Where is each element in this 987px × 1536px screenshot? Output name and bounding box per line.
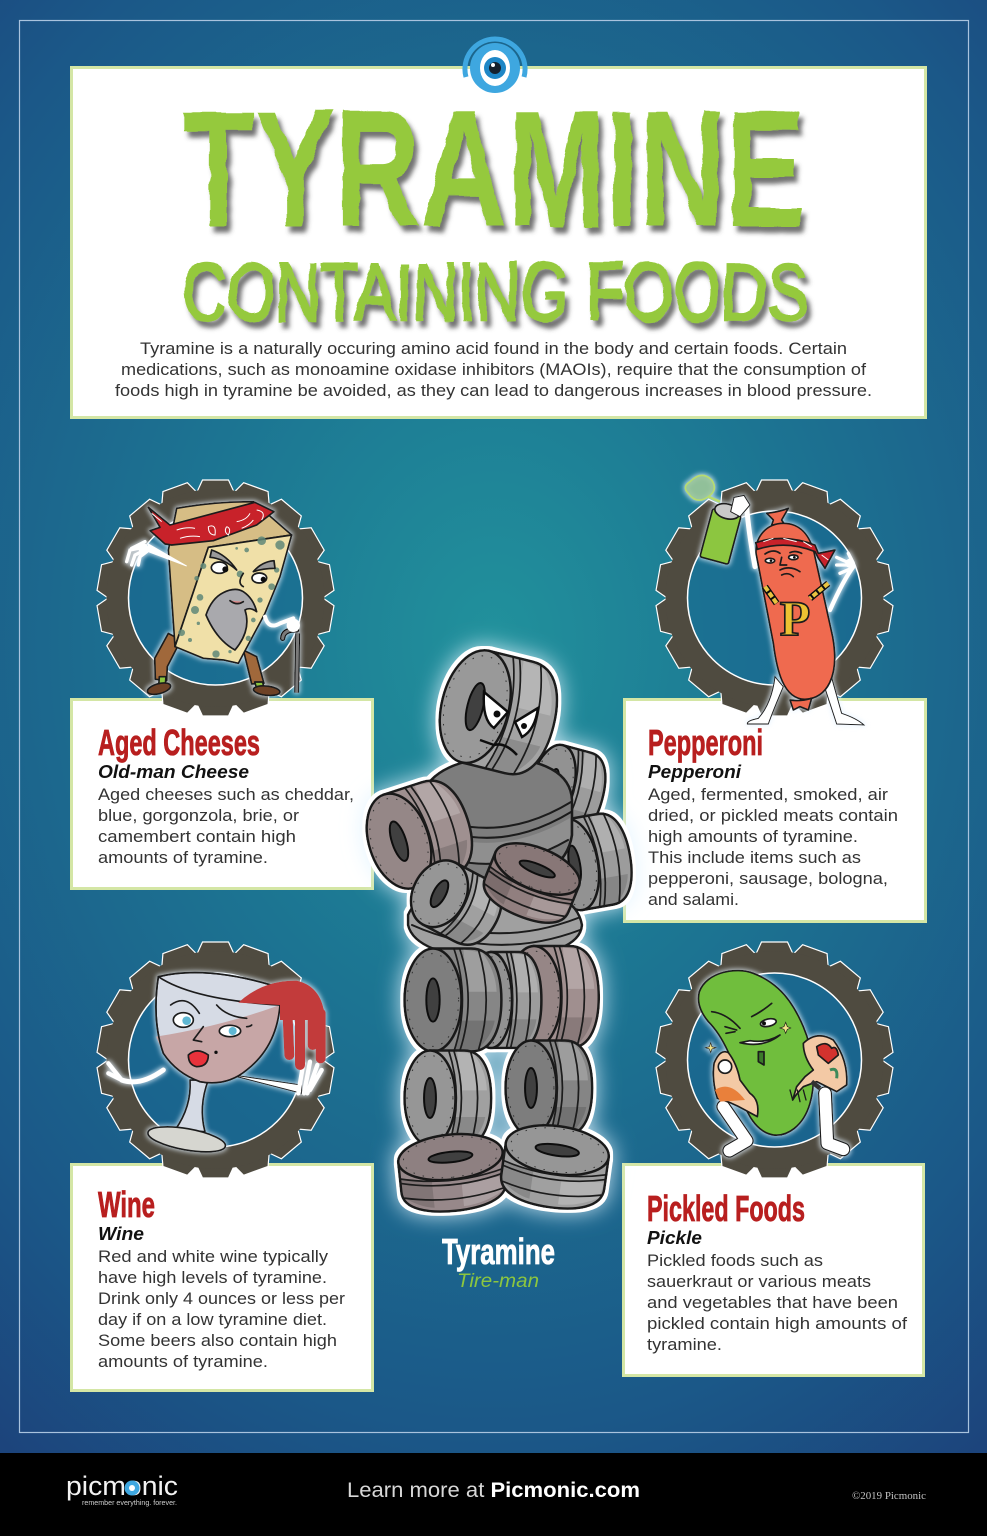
text: aged cheeses: amounts of tyramine. [98, 848, 268, 867]
waist tire [408, 888, 582, 960]
text: pepperoni: dried, or pickled meats contain [648, 806, 898, 825]
character: pepperoni: P [780, 590, 810, 646]
icon: gear pepperoni [655, 480, 894, 716]
copyright: ©2019 Picmonic [852, 1491, 926, 1502]
text: wine: Some beers also contain high [98, 1331, 337, 1350]
heading: pepperoni: Pepperoni [648, 722, 763, 763]
text: pickled foods: and vegetables that have been [647, 1293, 898, 1312]
character: tire-man [355, 643, 638, 1216]
text: pickled foods [647, 1251, 907, 1354]
text: wine: amounts of tyramine. [98, 1352, 268, 1371]
text: wine: have high levels of tyramine. [98, 1268, 327, 1287]
intro text: Tyramine is a naturally occuring amino acid found in the body and certain foods. Certain [140, 339, 847, 358]
text: pepperoni: This include items such as [648, 848, 861, 867]
text: pickled foods: tyramine. [647, 1335, 722, 1354]
text: aged cheeses: Aged cheeses such as cheddar, [98, 785, 354, 804]
text: pickled foods: pickled contain high amounts of [647, 1314, 907, 1333]
face: tire-man [480, 692, 538, 755]
icon: gear wine [96, 942, 335, 1178]
intro text: foods high in tyramine be avoided, as they can lead to dangerous increases in blood pressure. [115, 381, 872, 400]
label: tire-man: Tire-man [457, 1271, 539, 1292]
text: pepperoni: pepperoni, sausage, bologna, [648, 869, 888, 888]
footer logo: remember everything. forever. [82, 1498, 177, 1507]
label: tyramine: Tyramine [442, 1231, 555, 1272]
subheading: pickle: Pickle [647, 1228, 702, 1248]
character: wine glass [108, 973, 325, 1157]
panel: pickled foods [624, 1164, 924, 1376]
text: aged cheeses: camembert contain high [98, 827, 296, 846]
footer link: Learn more at Picmonic.com [347, 1478, 640, 1502]
text: pepperoni: Aged, fermented, smoked, air [648, 785, 888, 804]
text: wine [98, 1247, 345, 1371]
icon: gear pickle [655, 942, 894, 1178]
text: aged cheeses [98, 785, 354, 867]
character: pepperoni [685, 475, 864, 725]
panel: wine [72, 1164, 372, 1390]
icon: picmonic eye logo [465, 39, 525, 93]
subtitle: Containing Foods: CONTAINING FOODS [182, 247, 808, 338]
subheading: old-man cheese: Old-man Cheese [98, 762, 249, 782]
panel: pepperoni [624, 700, 926, 922]
panel: header [72, 68, 926, 418]
subheading: wine: Wine [98, 1224, 144, 1244]
text: pepperoni: and salami. [648, 890, 739, 909]
intro text: medications, such as monoamine oxidase inhibitors (MAOIs), require that the consumption of [121, 360, 866, 379]
footer [0, 1453, 987, 1536]
character: pickle [698, 971, 847, 1151]
text: pickled foods: Pickled foods such as [647, 1251, 823, 1270]
icon: gear aged cheeses [96, 480, 335, 716]
text: pepperoni [648, 785, 898, 909]
text: wine: day if on a low tyramine diet. [98, 1310, 327, 1329]
heading: wine: Wine [98, 1184, 155, 1225]
heading: pickled foods: Pickled Foods [647, 1188, 805, 1229]
intro text [115, 339, 872, 400]
heading: aged cheeses: Aged Cheeses [98, 722, 260, 763]
footer logo: picmonic [66, 1471, 178, 1501]
text: wine: Drink only 4 ounces or less per [98, 1289, 345, 1308]
torso tire [420, 757, 572, 885]
text: pepperoni: high amounts of tyramine. [648, 827, 858, 846]
panel: aged cheeses [72, 700, 372, 888]
subheading: pepperoni: Pepperoni [648, 762, 742, 782]
character: old-man cheese [127, 502, 300, 697]
text: pickled foods: sauerkraut or various meats [647, 1272, 871, 1291]
text: aged cheeses: blue, gorgonzola, brie, or [98, 806, 299, 825]
text: wine: Red and white wine typically [98, 1247, 329, 1266]
